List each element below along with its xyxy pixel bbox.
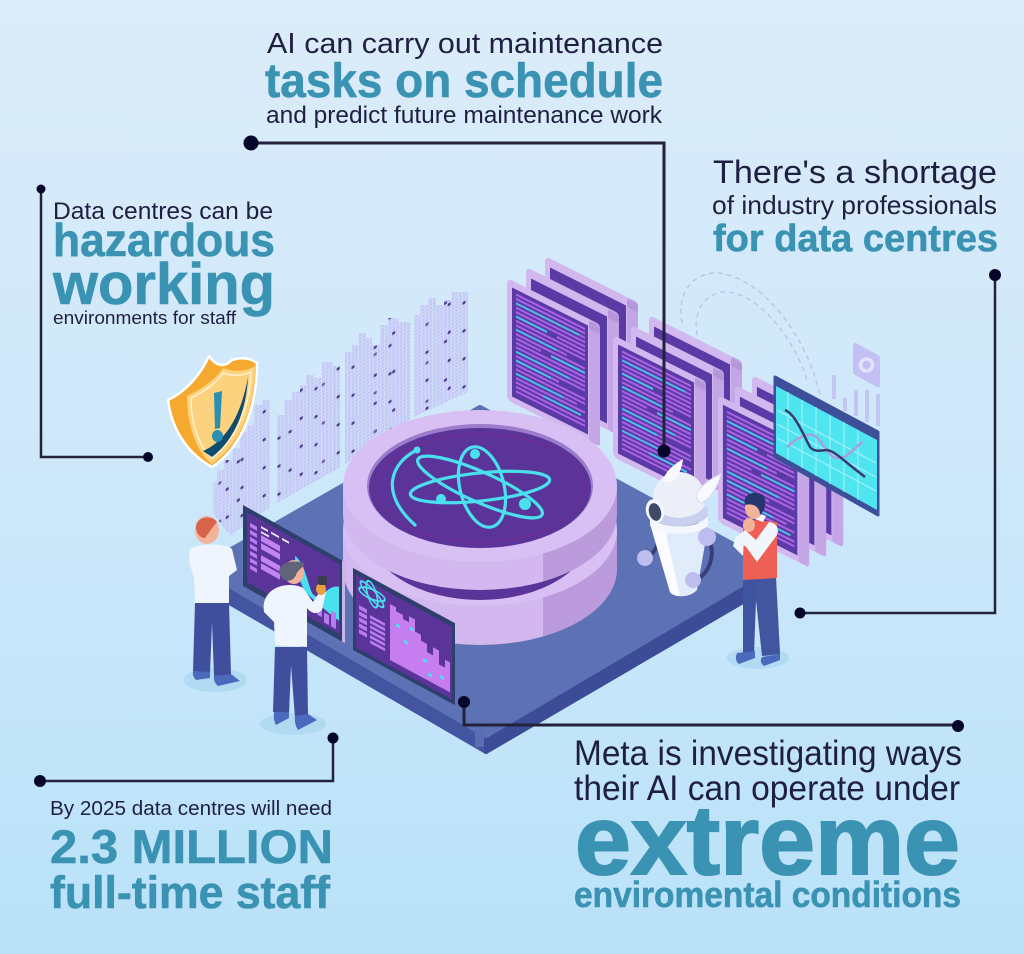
icon: gear tile <box>853 343 880 388</box>
text: hazardous <box>52 198 275 328</box>
lower disc <box>343 454 617 645</box>
monitor: atom chart <box>353 568 455 705</box>
icon: warning shield <box>168 356 257 467</box>
callout line: maintenance <box>244 136 670 458</box>
upper disc <box>343 410 617 590</box>
dashed arcs <box>681 273 820 395</box>
callout line: shortage <box>794 269 1001 618</box>
person: scientist touching screen <box>260 560 327 735</box>
text: shortage <box>712 154 998 260</box>
text: shortage: for data centres <box>713 218 998 260</box>
text: maintenance: AI can carry out maintenance <box>267 28 663 60</box>
text: hazardous: Data centres can be <box>53 198 273 225</box>
text: maintenance: tasks on schedule <box>265 55 663 108</box>
data wall <box>213 292 468 536</box>
text: Meta: enviromental conditions <box>574 874 961 915</box>
icon: atom <box>392 442 551 532</box>
robot head <box>653 472 705 522</box>
text: hazardous: working <box>52 252 275 317</box>
text: shortage: of industry professionals <box>712 190 997 220</box>
server rack group 2 <box>613 315 742 504</box>
text: hazardous: hazardous <box>53 214 275 266</box>
text: staff <box>50 798 333 918</box>
person: man in red vest <box>727 493 789 669</box>
robot body <box>651 527 708 596</box>
robot joints <box>637 550 653 566</box>
robot <box>637 459 721 596</box>
text: maintenance <box>265 28 663 129</box>
text: staff: 2.3 MILLION <box>50 820 333 873</box>
text: shortage: There's a shortage <box>713 154 997 190</box>
dark recess between discs <box>368 460 592 600</box>
text: Meta: Meta is investigating ways <box>574 734 962 773</box>
callout line: hazardous <box>36 184 153 462</box>
text: staff: By 2025 data centres will need <box>50 798 332 820</box>
callout line: Meta <box>458 696 964 732</box>
callout line: staff <box>34 732 338 787</box>
robot collar <box>650 516 708 534</box>
text: staff: full-time staff <box>50 867 331 918</box>
small bar decoration <box>832 375 880 426</box>
text: Meta: extreme <box>575 785 960 895</box>
robot arms <box>645 537 712 580</box>
robot ears <box>662 459 683 482</box>
person: scientist at left <box>183 516 247 692</box>
platform <box>200 408 772 752</box>
monitor: left dashboard <box>243 505 345 643</box>
text: Meta: their AI can operate under <box>574 769 960 808</box>
server rack group 1 <box>507 256 638 446</box>
text: maintenance: and predict future maintenance work <box>266 102 663 129</box>
server rack group 3 <box>718 375 843 567</box>
text: Meta <box>574 734 962 915</box>
robot eye <box>643 497 667 525</box>
central reactor disc <box>343 410 617 645</box>
monitor: cyan line chart <box>775 377 878 515</box>
text: hazardous: environments for staff <box>53 308 237 328</box>
